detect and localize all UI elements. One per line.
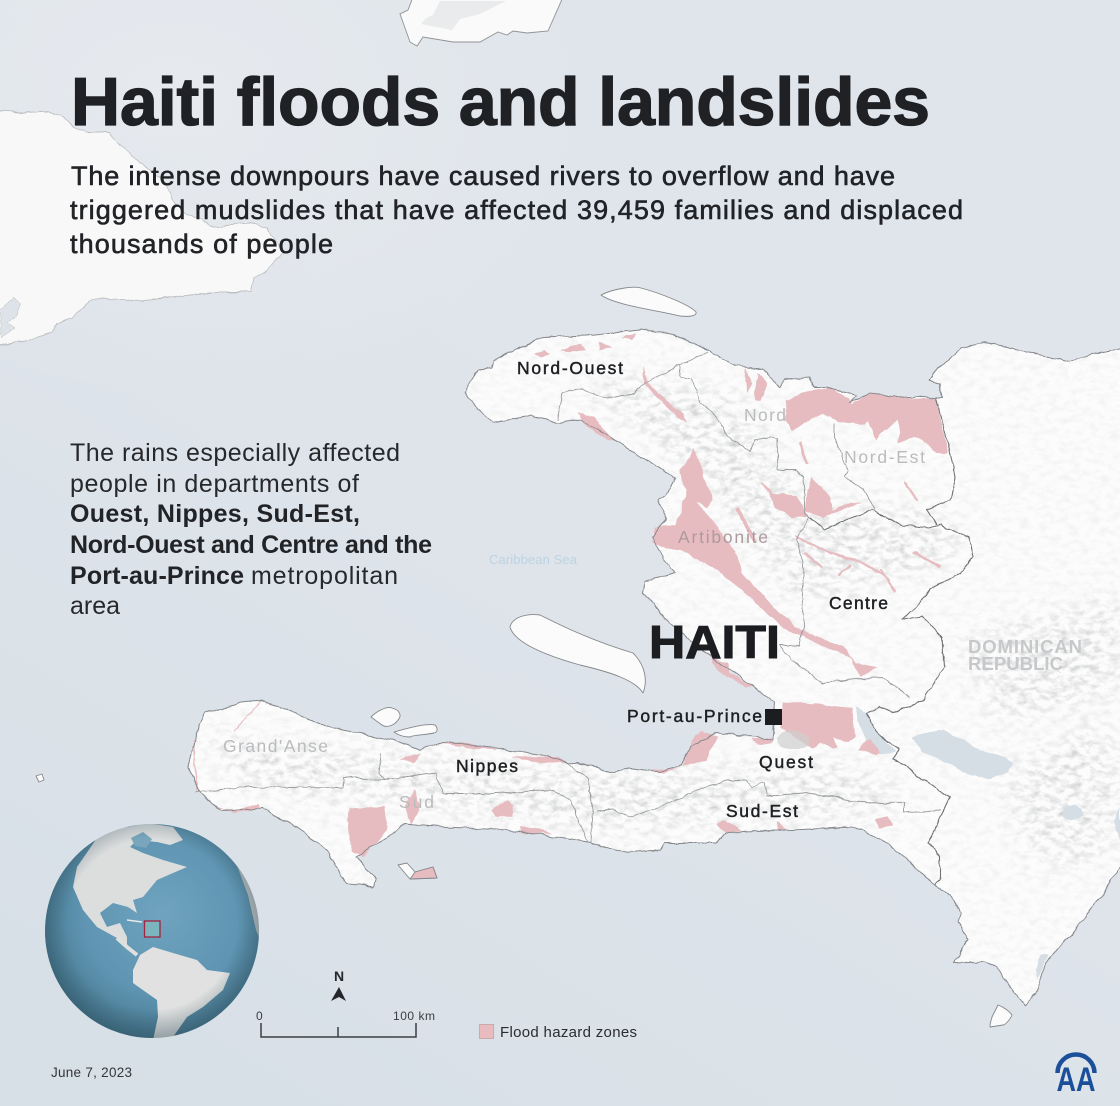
lakes [855,706,1120,978]
land: northern island at the top [400,0,563,46]
scale bar [256,1009,435,1037]
scale bar: 100 km [393,1009,435,1023]
subtitle: thousands of people [70,229,333,259]
locator box [144,921,160,937]
text block: affected departments: area [70,592,120,620]
north arrow [331,968,346,1001]
label: HAITI: HAITI [649,616,780,668]
title: Haiti floods and landslides [71,64,930,140]
label: Dominican Republic: DOMINICAN [968,636,1082,657]
label: Sud-Est: Sud-Est [726,801,798,821]
Hispaniola coastline [188,329,1120,1007]
North America [73,823,187,947]
terrain relief [196,338,1120,974]
legend: flood hazard zones: Flood hazard zones [500,1024,637,1041]
text block: affected departments: Nord-Ouest and Centre and the [70,531,432,559]
Central America and Caribbean [117,938,137,955]
date: June 7, 2023 [51,1065,132,1080]
subtitle: The intense downpours have caused rivers to overflow and have [71,161,895,191]
department borders [195,352,973,885]
flood hazard zones [193,333,948,857]
scale bar: 0 [256,1009,263,1023]
label: Grand'Anse: Grand'Anse [223,736,328,756]
label: Caribbean Sea: Caribbean Sea [489,552,578,567]
text block: affected departments [70,439,432,620]
label: Artibonite: Artibonite [678,527,768,547]
label: Quest: Quest [759,752,813,772]
text block: affected departments: Ouest, Nippes, Sud-Est, [70,500,360,528]
map: Hispaniola [180,320,1120,1020]
South America [133,947,230,1040]
label: Sud: Sud [399,792,434,812]
label: Nord-Ouest: Nord-Ouest [517,358,623,378]
icon: Anadolu Agency logo: AA [1056,1061,1096,1099]
label: Dominican Republic: REPUBLIC [968,653,1063,674]
text block: affected departments: Port-au-Prince [70,562,244,590]
subtitle [70,161,963,259]
Port-au-Prince urban area [777,731,809,749]
label: Nord: Nord [744,405,786,425]
label: Nippes: Nippes [456,756,518,776]
label: Port-au-Prince with capital marker: Port-au-Prince [627,706,762,726]
locator globe [45,823,262,1040]
text block: affected departments: The rains especially affected [70,439,400,467]
label: Nord-Est: Nord-Est [844,447,925,467]
islands [36,287,1012,1027]
icon: Anadolu Agency logo [1056,1054,1096,1099]
Hudson Bay [131,832,152,848]
subtitle: triggered mudslides that have affected 39,459 families and displaced [70,195,963,225]
label: Dominican Republic [968,636,1082,674]
label: Centre: Centre [829,593,888,613]
Africa and Europe edge [237,866,259,937]
text block: affected departments: metropolitan [251,562,398,590]
land: Cuba [0,111,282,345]
north arrow: N [334,968,344,984]
text block: affected departments: people in departments of [70,470,359,498]
